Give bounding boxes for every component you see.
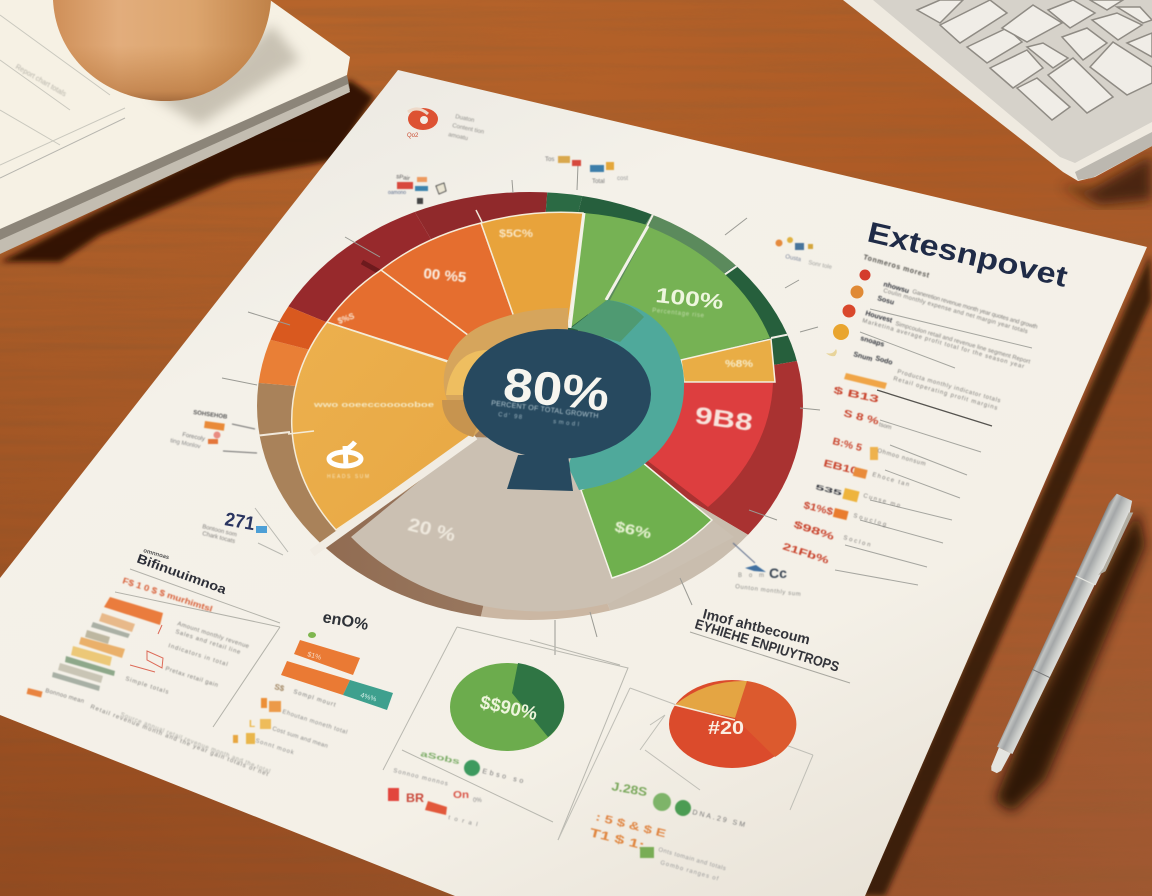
label: left callout: SOHSEHOB xyxy=(193,410,228,421)
pie legend: On xyxy=(453,790,469,801)
body text rows: Snum xyxy=(852,351,873,363)
panel: green pie xyxy=(383,627,628,840)
label: right top callout: Ousta xyxy=(785,254,802,263)
pie legend xyxy=(388,749,524,828)
label: top centre callout xyxy=(545,156,628,185)
panel: red pie xyxy=(558,605,850,883)
body text rows: Marketina average profit total for the season year xyxy=(861,318,1025,370)
value rows: 21Fb% xyxy=(781,541,830,567)
value rows: EB10 xyxy=(822,458,859,478)
rows: L xyxy=(249,719,255,730)
heading: EYHIEHE ENPIUYTROPS xyxy=(693,616,841,675)
value rows: tsom xyxy=(878,422,892,431)
mug xyxy=(53,0,271,101)
icon dots xyxy=(826,270,870,356)
pie chart: $$90% xyxy=(478,692,539,725)
body text rows: Retail operating profit margins xyxy=(892,376,998,412)
panel heading xyxy=(121,548,229,614)
heading: enO% xyxy=(321,609,370,634)
label: left callout: ting Monlov xyxy=(170,438,201,450)
highlight bar xyxy=(844,373,887,389)
heading: Imof ahtbecoum xyxy=(701,605,812,648)
icon caption: HEADS SUM xyxy=(327,474,369,480)
bar notes: Indicators in total xyxy=(167,643,228,668)
pie chart xyxy=(669,680,796,768)
pie legend: Ebso so xyxy=(482,768,524,785)
body text rows: Simpcoulon retail and revenue line segment Report xyxy=(894,321,1031,366)
hub centre circle xyxy=(463,329,651,491)
beige slice value: 20 % xyxy=(406,514,457,545)
leader lines xyxy=(222,165,820,655)
label: 271 callout: Chark tocats xyxy=(202,531,236,545)
bar notes: Retail revenue month and the year gain totals of net xyxy=(89,704,269,778)
label: right top callout xyxy=(776,237,833,271)
icon: green dot xyxy=(308,632,316,638)
rules xyxy=(835,309,1032,585)
pie chart: #20 xyxy=(708,718,744,738)
panel: small bars xyxy=(233,609,393,757)
label: right top callout: Sonr tole xyxy=(808,260,833,271)
label: left callout xyxy=(170,410,257,453)
panel heading: omnnoas xyxy=(142,548,170,561)
amber top slice: $5C% xyxy=(499,228,533,240)
pie chart xyxy=(450,663,564,751)
small amber slice xyxy=(681,339,775,382)
body text rows xyxy=(852,281,1038,412)
value rows: $98% xyxy=(792,519,836,543)
main donut chart xyxy=(257,192,803,620)
gap stripe xyxy=(312,436,475,553)
pie legend: T1 $ 1: xyxy=(588,825,646,852)
small amber slice: %8% xyxy=(725,359,753,370)
subtitle: Tonmeros morest xyxy=(862,254,930,280)
pen xyxy=(984,492,1145,812)
body text rows: Sodo xyxy=(874,355,893,367)
body text rows: Ganeretion revenue month year quotes and growth xyxy=(911,289,1038,331)
label: lower right callout with arrow: Bom xyxy=(738,573,764,579)
value rows: B:% 5 xyxy=(831,436,863,454)
bar notes: Pretax retail gain xyxy=(164,666,219,689)
pie legend: 0% xyxy=(473,798,482,804)
green slice value: 100% xyxy=(654,284,725,314)
pie legend: Sonnoo monnos xyxy=(393,768,448,787)
panel: lower left bar list xyxy=(27,548,280,778)
value rows: Soclon xyxy=(842,535,871,549)
slice label text: wwo ooeeccoooooboe xyxy=(312,402,434,409)
bar notes xyxy=(44,621,269,778)
bar notes: Simple totals xyxy=(124,676,169,696)
label: lower right callout with arrow xyxy=(733,543,801,598)
green lower slice: $6% xyxy=(613,518,653,543)
green lower slice xyxy=(581,462,712,578)
body text rows: Coulin monthly expense and net margin year totals xyxy=(882,288,1028,335)
pie legend: Gombo ranges of xyxy=(659,860,719,883)
rows: Sompl mourt xyxy=(292,689,336,709)
label: top left logo: amoatu xyxy=(448,132,468,142)
body text rows: Houvest xyxy=(864,310,894,325)
label: 271 callout: 271 xyxy=(223,509,257,535)
label: 271 callout: Bontoon som xyxy=(202,524,237,538)
pie legend: BR xyxy=(406,791,424,805)
body text rows: nhowsu xyxy=(882,281,910,295)
hub caption: smodl xyxy=(553,419,579,428)
label: top centre callout: cost xyxy=(617,176,628,182)
label: top centre callout: Tos xyxy=(545,157,554,163)
bars xyxy=(27,597,163,697)
label: 271 callout xyxy=(202,509,267,545)
orange lower slice: $%S xyxy=(337,311,356,326)
amber top slice xyxy=(481,212,583,327)
label: top left logo: Qo2 xyxy=(407,133,419,139)
pie legend: toral xyxy=(448,815,478,828)
bar notes: Amount monthly revenue xyxy=(176,621,250,650)
orange bar top: $1% xyxy=(306,651,322,662)
title: Extesnpovet xyxy=(864,217,1071,294)
green top slices xyxy=(570,213,770,370)
footer faint text: Source annual retail revenue month and the total xyxy=(119,712,271,775)
bar notes: Bonnoo mean xyxy=(44,688,85,705)
green slice caption: Percentage rise xyxy=(652,308,705,319)
headline value: 80% xyxy=(501,357,612,421)
rows xyxy=(233,682,348,757)
panel heading: F$ 1 0 $ $ murhimtsl xyxy=(121,576,214,614)
label: lower right callout with arrow: Cc xyxy=(769,565,787,581)
value rows: Ohmoo nonsum xyxy=(876,448,926,468)
red slice xyxy=(644,383,773,507)
orange upper slice: 00 %5 xyxy=(423,265,467,286)
label: top left callout xyxy=(388,174,446,204)
pie legend: : 5 $ & $ E xyxy=(594,811,667,840)
notebook under the mug: Report chart totals xyxy=(14,64,67,99)
red slice: 9B8 xyxy=(693,402,754,437)
rows: Ehoutan moneth total xyxy=(281,709,348,736)
bar notes: Sales and retail line xyxy=(174,629,242,656)
label: top centre callout: Total xyxy=(592,179,605,185)
notebook under the mug xyxy=(0,0,374,262)
pie legend xyxy=(588,779,746,883)
amber slice with icon xyxy=(288,322,473,530)
value rows: Souclog xyxy=(852,513,887,528)
keyboard xyxy=(843,0,1152,205)
label: top left logo: Content tion xyxy=(452,123,484,136)
value rows xyxy=(781,385,926,567)
orange and teal bar: 4%% xyxy=(359,692,377,703)
rows: S$ xyxy=(274,682,286,693)
orange lower slice xyxy=(327,270,488,362)
pie legend: Onts tomain and totals xyxy=(657,847,726,872)
body text rows: snoaps xyxy=(859,335,885,349)
value rows: Cunse mo xyxy=(862,493,901,510)
pie legend: J.28S xyxy=(610,779,648,799)
beige slice xyxy=(351,437,734,611)
right legend list xyxy=(781,254,1038,585)
hub left ring xyxy=(442,308,568,437)
hub caption: PERCENT OF TOTAL GROWTH xyxy=(491,400,599,420)
label: top left logo xyxy=(407,108,484,142)
value rows: S 8 % xyxy=(842,408,880,428)
orange upper slice xyxy=(381,223,520,350)
hub caption: Cd' 98 xyxy=(498,412,523,421)
rows: Sonnt mook xyxy=(254,738,295,757)
panel heading: Bifinuuimnoa xyxy=(135,551,229,597)
pie legend: aSobs xyxy=(420,749,461,766)
value rows: $1%$ xyxy=(802,500,835,518)
orange bar top xyxy=(294,640,360,675)
icon: white knot xyxy=(329,442,361,466)
label: top left logo: Duaton xyxy=(455,114,475,124)
label: lower right callout with arrow: Ounton monthly sum xyxy=(735,584,801,598)
label: left callout: Forecoly xyxy=(182,432,205,443)
rows: Cost sum and mean xyxy=(271,726,328,750)
value rows: 535 xyxy=(815,484,843,498)
orange and teal bar xyxy=(281,661,393,710)
body text rows: Producta monthly indicator totals xyxy=(896,369,1001,404)
label: top left callout: sPair xyxy=(396,174,410,182)
hub teal ring xyxy=(568,300,684,490)
label: top left callout: oamono xyxy=(388,190,406,196)
value rows: Ehoce tan xyxy=(871,472,910,488)
value rows: $ B13 xyxy=(832,385,880,406)
outer ring segments xyxy=(257,192,803,620)
body text rows: Sosu xyxy=(876,295,895,307)
pie legend: DNA.29 SM xyxy=(692,809,746,829)
